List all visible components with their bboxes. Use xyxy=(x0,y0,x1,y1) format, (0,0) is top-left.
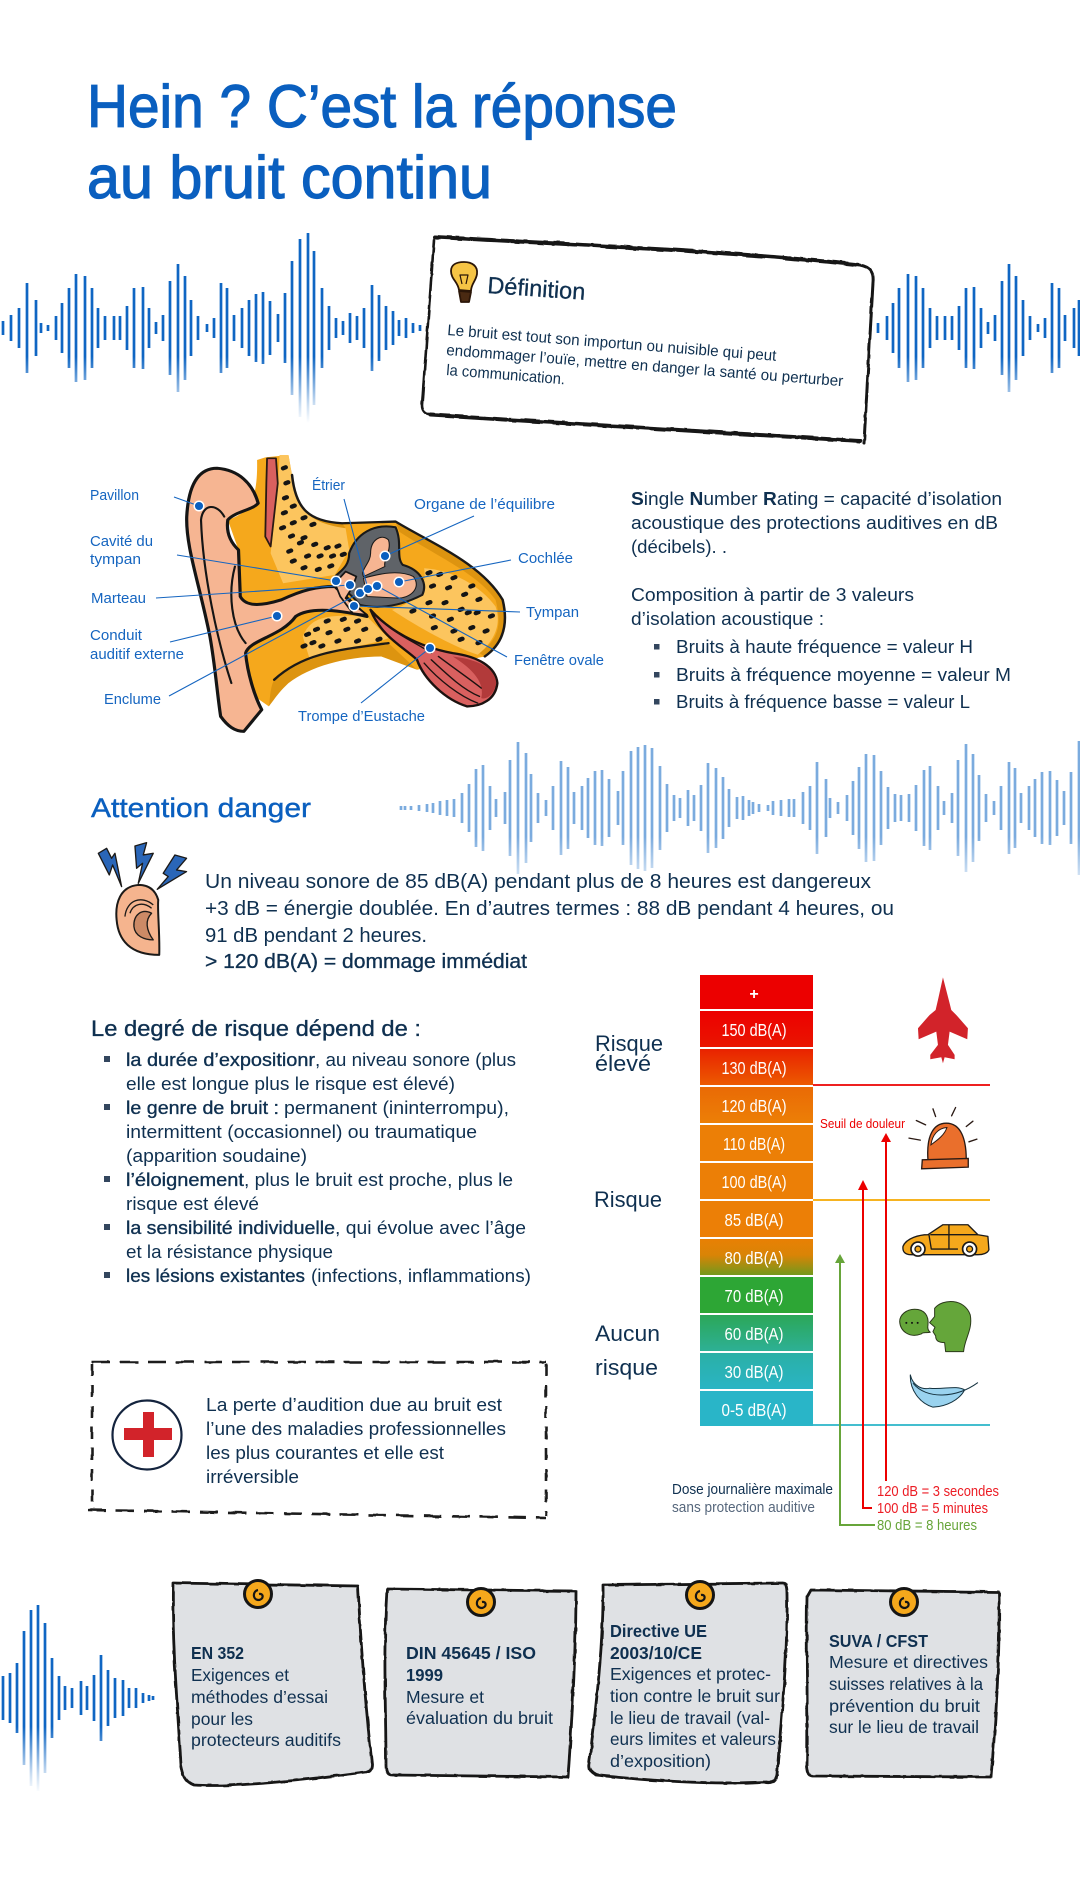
risk bullet list: (infections, inflammations) xyxy=(311,1265,531,1286)
ear labels: Trompe d’Eustache xyxy=(298,708,425,725)
risk labels: Risque xyxy=(595,1031,663,1056)
decibel scale bars: 70 dB(A) xyxy=(724,1286,784,1306)
card text: Exigences et protec- xyxy=(610,1664,771,1684)
card: Directive UE xyxy=(589,1582,787,1783)
danger text: 91 dB pendant 2 heures. xyxy=(205,925,427,947)
callout: hearing loss xyxy=(88,1362,546,1518)
icon: ear with lightning xyxy=(98,843,187,955)
card text xyxy=(829,1631,988,1737)
ear labels xyxy=(90,477,604,725)
risk bullet list: le genre de bruit : xyxy=(126,1097,279,1118)
panel: definition xyxy=(422,237,873,443)
card text: suisses relatives à la xyxy=(829,1674,983,1694)
card text: SUVA / CFST xyxy=(829,1631,928,1651)
card text: prévention du bruit xyxy=(829,1696,980,1716)
ear illustration xyxy=(187,455,505,731)
card text: le lieu de travail (val- xyxy=(610,1708,770,1728)
ear labels: Fenêtre ovale xyxy=(514,652,604,669)
definition text: endommager l’ouïe, mettre en danger la santé ou perturber xyxy=(446,342,844,390)
marker dots xyxy=(194,501,435,653)
decibel scale bars: 120 dB(A) xyxy=(722,1096,786,1116)
card text: méthodes d’essai xyxy=(191,1687,328,1707)
risk bullet list: les lésions existantes xyxy=(126,1265,305,1286)
icon: red cross xyxy=(112,1400,182,1470)
heading: attention danger: Attention danger xyxy=(91,793,311,823)
ear labels: Organe de l’équilibre xyxy=(414,496,555,513)
dose values: 80 dB = 8 heures xyxy=(877,1517,977,1534)
card shape xyxy=(385,1589,576,1777)
decibel scale bars: 80 dB(A) xyxy=(724,1248,784,1268)
card text: pour les xyxy=(191,1709,253,1729)
decibel scale bars: 110 dB(A) xyxy=(723,1134,785,1154)
definition text xyxy=(446,322,844,390)
card text: 2003/10/CE xyxy=(610,1643,702,1663)
callout text: les plus courantes et elle est xyxy=(206,1442,444,1463)
card: SUVA / CFST xyxy=(807,1588,999,1777)
title xyxy=(87,73,677,211)
card text xyxy=(191,1643,341,1750)
pin xyxy=(244,1580,272,1608)
ear labels: Enclume xyxy=(104,691,161,708)
decibel scale bars: 150 dB(A) xyxy=(722,1020,786,1040)
decibel scale bars: 0-5 dB(A) xyxy=(722,1400,786,1420)
ear labels: Cavité du xyxy=(90,533,153,550)
risk bullet list: , qui évolue avec l’âge xyxy=(335,1217,526,1238)
arrow: 120 dB xyxy=(881,1133,891,1481)
definition heading: Définition xyxy=(487,272,586,305)
dashed frame xyxy=(88,1362,546,1518)
definition text: la communication. xyxy=(446,362,566,388)
risk labels xyxy=(594,1031,663,1380)
bullet list: noise values: Bruits à haute fréquence = valeur H xyxy=(676,636,973,657)
callout text: irréversible xyxy=(206,1466,299,1487)
card text: sur le lieu de travail xyxy=(829,1717,979,1737)
risk bullet list: l’éloignement xyxy=(126,1169,244,1190)
risk bullet list: permanent (ininterrompu), xyxy=(284,1097,509,1118)
danger text: > 120 dB(A) = dommage immédiat xyxy=(205,951,527,973)
ear labels: Tympan xyxy=(526,604,579,621)
risk bullet list: elle est longue plus le risque est élevé) xyxy=(126,1073,455,1094)
decibel scale bars: 30 dB(A) xyxy=(724,1362,784,1382)
card text: Directive UE xyxy=(610,1621,707,1641)
card text: Mesure et xyxy=(406,1687,484,1707)
card text: protecteurs auditifs xyxy=(191,1730,341,1750)
dose label: Dose journalière maximale xyxy=(672,1482,833,1498)
card text: d’exposition) xyxy=(610,1751,711,1771)
bullet list: noise values: Bruits à fréquence basse = valeur L xyxy=(676,691,970,712)
danger text: +3 dB = énergie doublée. En d’autres termes : 88 dB pendant 4 heures, ou xyxy=(205,898,894,920)
card: DIN 45645 xyxy=(385,1588,576,1777)
SNR text block: acoustique des protections auditives en dB xyxy=(631,512,998,533)
ear labels: Étrier xyxy=(312,477,345,494)
risk labels: Aucun xyxy=(595,1321,660,1346)
card text: 1999 xyxy=(406,1665,443,1685)
title: au bruit continu xyxy=(87,144,492,211)
risk bullet list: , au niveau sonore (plus xyxy=(315,1049,516,1070)
decibel scale bars: 100 dB(A) xyxy=(722,1172,786,1192)
risk bullet list: et la résistance physique xyxy=(126,1241,333,1262)
decibel scale bars: 85 dB(A) xyxy=(724,1210,784,1230)
SNR text block: (décibels). . xyxy=(631,536,727,557)
sound wave middle xyxy=(401,741,1079,875)
risk bullet list: la durée d’expositionr xyxy=(126,1049,315,1070)
ear labels: tympan xyxy=(90,551,141,568)
danger text: Un niveau sonore de 85 dB(A) pendant plus de 8 heures est dangereux xyxy=(205,871,871,893)
noise level chart xyxy=(594,975,999,1534)
risk labels: Risque xyxy=(594,1187,662,1212)
icon: siren xyxy=(909,1108,977,1169)
definition text: Le bruit est tout son importun ou nuisible qui peut xyxy=(447,322,778,365)
risk bullet list: intermittent (occasionnel) ou traumatique xyxy=(126,1121,477,1142)
card text: Exigences et xyxy=(191,1665,289,1685)
bullet list: noise values xyxy=(654,636,1011,712)
arrow: 100 dB xyxy=(858,1180,872,1508)
pin xyxy=(686,1582,714,1608)
title: Hein ? C’est la réponse xyxy=(87,73,677,140)
callout text xyxy=(206,1394,506,1487)
ear labels: Pavillon xyxy=(90,487,139,504)
pin xyxy=(468,1588,494,1616)
sound wave right xyxy=(878,264,1079,392)
card text: eurs limites et valeurs xyxy=(610,1729,776,1749)
dose label: sans protection auditive xyxy=(672,1500,815,1516)
card shape xyxy=(807,1590,999,1777)
threshold lines xyxy=(813,1084,990,1086)
SNR text block: Single Number Rating = capacité d’isolation xyxy=(631,488,1002,509)
decibel scale bars: 130 dB(A) xyxy=(722,1058,786,1078)
card text xyxy=(610,1621,780,1771)
sound wave left xyxy=(3,233,420,423)
SNR text block: Composition à partir de 3 valeurs xyxy=(631,584,914,605)
risk bullet list: , plus le bruit est proche, plus le xyxy=(244,1169,513,1190)
card text: tion contre le bruit sur xyxy=(610,1686,780,1706)
card text xyxy=(406,1643,553,1728)
label: pain threshold: Seuil de douleur xyxy=(820,1117,905,1131)
dose label xyxy=(672,1482,833,1516)
card shape xyxy=(173,1583,372,1786)
danger text xyxy=(205,871,894,973)
dose values: 100 dB = 5 minutes xyxy=(877,1500,988,1517)
dose values: 120 dB = 3 secondes xyxy=(877,1483,999,1500)
card shape xyxy=(589,1583,787,1783)
card text: DIN 45645 / ISO xyxy=(406,1643,536,1663)
decibel scale bars: + xyxy=(749,986,759,1003)
icon: feather xyxy=(910,1375,978,1407)
risk labels: risque xyxy=(595,1355,658,1380)
risk bullet list: (apparition soudaine) xyxy=(126,1145,307,1166)
callout text: l’une des maladies professionnelles xyxy=(206,1418,506,1439)
sound wave bottom xyxy=(3,1605,153,1791)
risk bullet list: risque est élevé xyxy=(126,1193,259,1214)
decibel scale bars xyxy=(700,975,813,1426)
card text: évaluation du bruit xyxy=(406,1708,553,1728)
risk factors block xyxy=(91,1016,531,1286)
SNR text block: d’isolation acoustique : xyxy=(631,608,824,629)
ear labels: auditif externe xyxy=(90,646,184,663)
bullet list: noise values: Bruits à fréquence moyenne = valeur M xyxy=(676,664,1011,685)
risk heading: Le degré de risque dépend de : xyxy=(91,1016,421,1041)
ear labels: Marteau xyxy=(91,590,146,607)
definition frame xyxy=(422,237,873,443)
callout text: La perte d’audition due au bruit est xyxy=(206,1394,502,1415)
leader lines xyxy=(156,497,520,703)
ear labels: Conduit xyxy=(90,627,143,644)
arrow: 80 dB xyxy=(835,1254,875,1525)
dose values xyxy=(877,1483,999,1534)
icon: speaking head xyxy=(900,1301,971,1352)
risk labels: élevé xyxy=(595,1051,651,1076)
SNR text block xyxy=(631,488,1011,712)
card text: Mesure et directives xyxy=(829,1652,988,1672)
risk bullet list xyxy=(104,1049,531,1286)
card text: EN 352 xyxy=(191,1643,244,1663)
icon: fighter jet xyxy=(918,977,968,1063)
ear anatomy diagram xyxy=(90,455,604,731)
risk bullet list: la sensibilité individuelle xyxy=(126,1217,335,1238)
pin xyxy=(890,1588,918,1616)
icon: light bulb xyxy=(451,262,477,302)
ear labels: Cochlée xyxy=(518,550,573,567)
card: EN 352 xyxy=(173,1580,372,1786)
decibel scale bars: 60 dB(A) xyxy=(724,1324,784,1344)
icon: car xyxy=(903,1225,989,1256)
